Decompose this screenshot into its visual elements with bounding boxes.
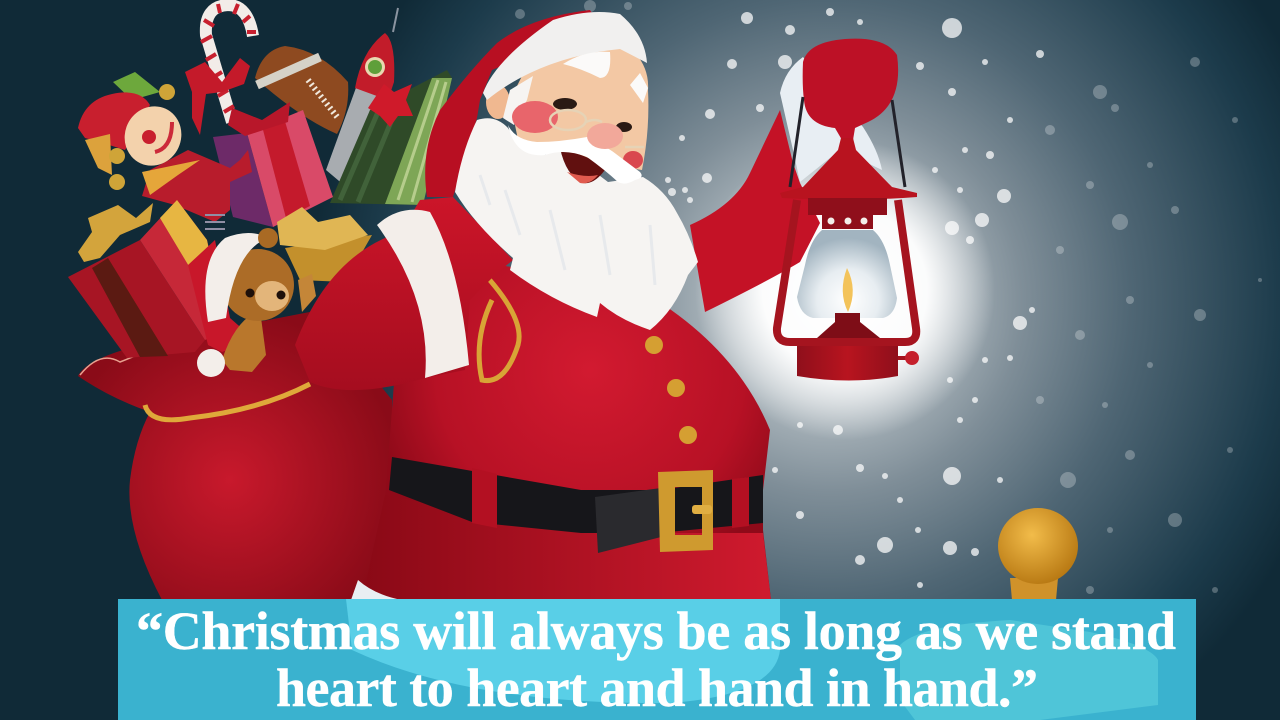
santa left arm [295,197,513,390]
belt [389,457,763,533]
beard strands [480,175,655,285]
quote text: “Christmas will always be as long as we stand [136,601,1176,661]
burner [817,313,880,338]
striped gift [68,200,228,358]
sideburn [503,76,533,125]
gold gift [277,207,372,282]
spring [205,215,225,229]
glass globe [797,230,897,318]
buckle [658,470,713,552]
caption banner [118,599,1196,720]
tongue [567,172,598,183]
coat trim tint [346,599,780,703]
teddy bear [188,228,316,377]
santa raised arm [690,39,898,312]
lantern roof [780,138,917,200]
toys [68,4,452,377]
jester [78,72,252,222]
lantern glow [695,140,995,440]
quote text: heart to heart and hand in hand.” [276,658,1038,718]
glasses [550,110,644,147]
snow particles [515,0,1262,594]
belt tail [595,488,661,553]
santa head [425,10,698,330]
gold bow [78,203,153,262]
gold post knob [998,508,1078,600]
red bow [368,84,413,127]
candy cane [201,4,256,122]
sack [78,310,392,600]
fur cuff [780,57,882,182]
flame [843,268,853,312]
face [510,40,648,170]
hat [425,10,600,197]
right cheek [623,151,643,169]
green gift [330,70,452,205]
moustache [508,125,642,184]
buckle prong [692,505,712,514]
cane ribbon [185,58,250,135]
pedestal tint [900,620,1158,720]
lantern [777,97,919,380]
buttons [645,336,663,354]
belt loops [472,468,749,528]
football [255,46,348,134]
arm cuff [377,210,469,378]
knob [898,356,908,360]
lower coat [362,495,771,600]
hat fur band [483,12,647,100]
mitten [803,39,898,140]
lantern handle [790,97,905,187]
ear [486,85,510,119]
nose [587,123,623,149]
drawstring [479,278,519,381]
fur trim [351,580,402,600]
pink gift [213,102,333,227]
lantern frame [777,200,916,342]
mouth [560,148,607,183]
eyes [553,98,577,110]
santa body [351,265,771,600]
lantern base [797,346,898,380]
rocket [326,8,398,186]
eyebrows [563,52,648,103]
left cheek [512,101,558,133]
lantern collar [808,198,887,229]
beard [455,118,698,330]
